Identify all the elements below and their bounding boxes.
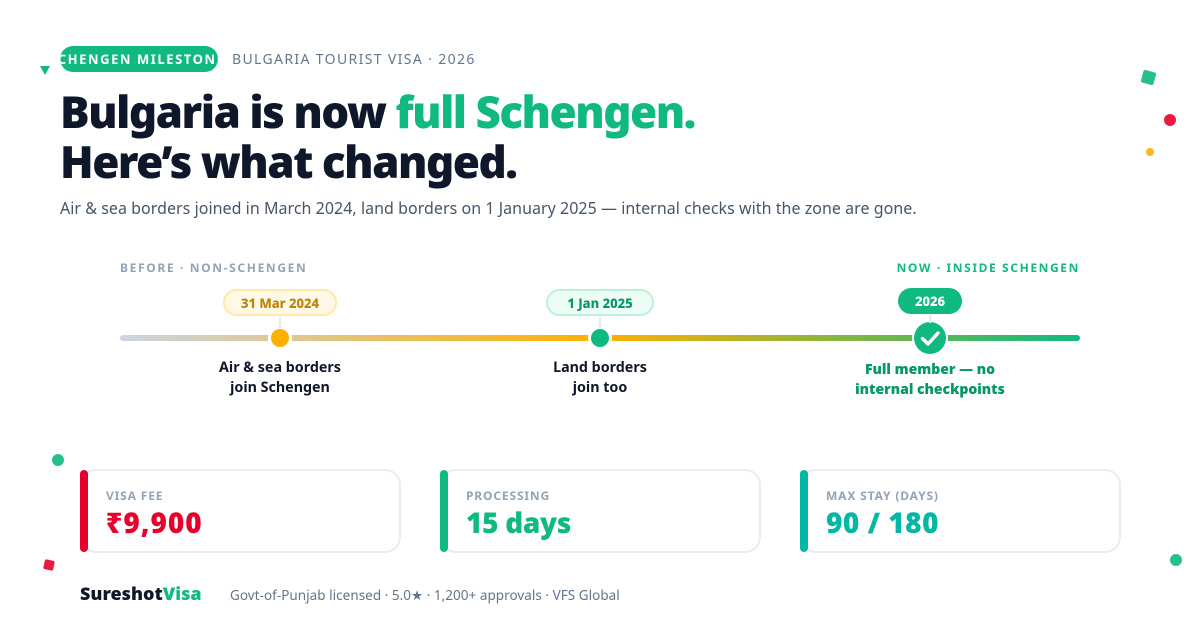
confetti: green dot right <box>1170 554 1182 566</box>
stem: second milestone <box>599 317 601 327</box>
confetti: green dot left <box>52 454 64 466</box>
value: ₹9,900 <box>106 504 203 542</box>
title: Bulgaria is now full Schengen. <box>60 81 695 141</box>
caption <box>553 358 647 397</box>
date pill: 2026 <box>915 292 945 310</box>
title <box>60 81 695 191</box>
confetti: red dot <box>1164 114 1176 126</box>
check marker <box>912 322 948 354</box>
milestone: 1 Jan 2025 <box>546 289 654 397</box>
caption: internal checkpoints <box>855 380 1005 399</box>
timeline <box>120 259 1080 399</box>
caption: join too <box>573 378 627 397</box>
confetti: green square <box>1141 70 1156 85</box>
confetti: amber dot <box>1146 148 1154 156</box>
date pill: 1 Jan 2025 <box>567 294 633 312</box>
confetti: triangle <box>40 66 50 75</box>
subtitle: Air & sea borders joined in March 2024, land borders on 1 January 2025 — internal checks with the zone are gone. <box>60 197 917 219</box>
milestone: 31 Mar 2024 <box>219 289 341 397</box>
date pill <box>223 289 337 316</box>
card outline <box>800 469 1121 553</box>
stat card: max stay <box>800 469 1121 553</box>
caption <box>219 358 341 397</box>
value: 90 / 180 <box>826 504 939 542</box>
caption: Full member — no <box>865 360 995 379</box>
label: MAX STAY (DAYS) <box>826 487 939 504</box>
stem: first milestone <box>279 317 281 327</box>
accent bar <box>440 470 448 552</box>
footer credentials: Govt-of-Punjab licensed · 5.0★ · 1,200+ approvals · VFS Global <box>230 586 620 604</box>
title: Here’s what changed. <box>60 131 516 191</box>
value: 15 days <box>466 504 571 542</box>
label: VISA FEE <box>106 487 163 504</box>
accent bar <box>80 470 88 552</box>
gradient track <box>120 335 1080 341</box>
caption <box>855 360 1005 399</box>
date pill: 31 Mar 2024 <box>241 294 319 312</box>
eyebrow text: BULGARIA TOURIST VISA · 2026 <box>232 50 476 69</box>
marker <box>268 326 292 350</box>
label: PROCESSING <box>466 487 550 504</box>
confetti: red square <box>43 559 55 571</box>
caption: join Schengen <box>230 378 330 397</box>
card outline <box>440 469 761 553</box>
badge: Schengen milestone <box>60 46 218 72</box>
date pill <box>898 288 962 314</box>
accent bar <box>800 470 808 552</box>
marker <box>588 326 612 350</box>
caption: Air & sea borders <box>219 358 341 377</box>
label: now: NOW · INSIDE SCHENGEN <box>897 259 1080 276</box>
date pill <box>546 289 654 316</box>
caption: Land borders <box>553 358 647 377</box>
stat card: visa fee <box>80 469 401 553</box>
brand logo: SureshotVisa <box>80 582 202 606</box>
label: before: BEFORE · NON-SCHENGEN <box>120 259 307 276</box>
stat card: processing <box>440 469 761 553</box>
card outline <box>80 469 401 553</box>
stem: third milestone <box>929 315 931 323</box>
milestone: 2026 <box>855 288 1005 399</box>
